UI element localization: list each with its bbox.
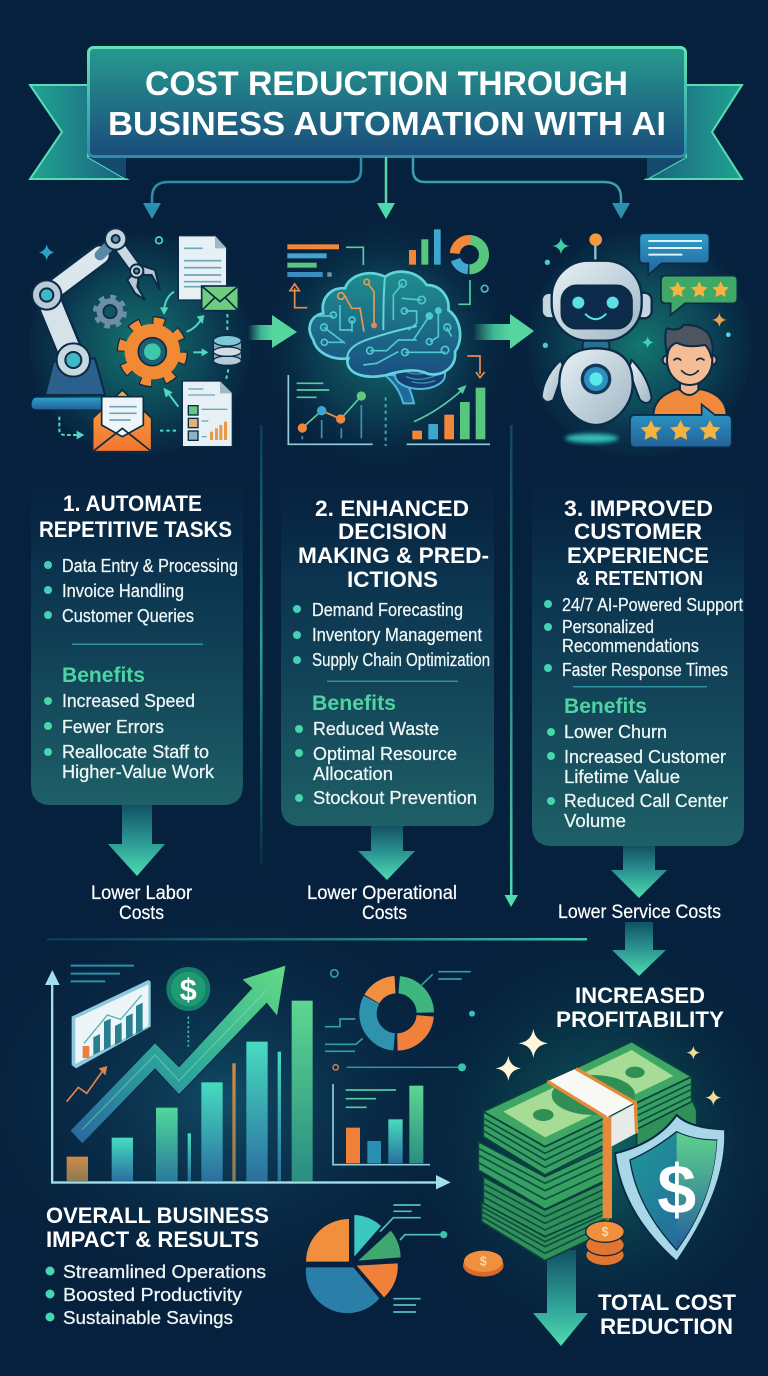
results list: Boosted Productivity [63, 1285, 242, 1305]
heading: total cost reduction: TOTAL COST [598, 1290, 737, 1315]
donut chart [358, 974, 436, 1052]
cerebellum and brain stem [383, 361, 445, 403]
feature list: Personalized [562, 617, 654, 637]
horizontal connector [47, 938, 587, 940]
arrow: banner to column 2 [377, 157, 395, 219]
feature list: Faster Response Times [562, 660, 728, 680]
orange envelope [93, 390, 152, 452]
small gear [95, 297, 125, 326]
arrow: banner to column 3 [413, 157, 630, 219]
heading: increased profitability: INCREASED [575, 983, 705, 1008]
benefits: Volume [564, 811, 626, 831]
heading: DECISION [338, 519, 447, 544]
mini bars and donut [409, 229, 488, 304]
panel: automate repetitive tasks [31, 470, 243, 805]
small bar chart [333, 1011, 475, 1165]
axes [45, 970, 451, 1189]
benefits: Benefits [312, 692, 396, 715]
arrow: to total cost reduction [533, 1250, 588, 1346]
growth bar chart [407, 356, 490, 444]
robot arm joints [32, 228, 160, 377]
pie callouts [380, 1205, 447, 1312]
label: lower operational costs: Lower Operational [307, 883, 457, 904]
heading: 1. AUTOMATE [63, 491, 202, 516]
capability list: Inventory Management [312, 625, 482, 645]
benefits [295, 692, 477, 808]
heading: increased profitability: PROFITABILITY [556, 1007, 724, 1032]
green envelope [202, 286, 238, 311]
benefits: Fewer Errors [62, 717, 164, 737]
task list [44, 556, 238, 626]
brain outline [310, 272, 460, 377]
bill stack top [483, 1042, 692, 1175]
panel: enhanced decision making [281, 470, 494, 826]
shield: $ [657, 1150, 696, 1228]
banner plate [88, 48, 686, 156]
benefits: Stockout Prevention [313, 788, 477, 808]
label: lower labor costs: Costs [119, 903, 164, 924]
banner ribbon tail right [647, 85, 742, 179]
task list: Invoice Handling [62, 581, 184, 601]
workflow arrows [59, 237, 228, 439]
large orange gear [122, 322, 182, 382]
feature list [544, 595, 743, 680]
task list: Data Entry & Processing [62, 556, 238, 576]
capability list [293, 600, 490, 670]
donut callout lines [325, 970, 471, 1051]
bill stack bottom [482, 1202, 610, 1261]
single coin: $ [480, 1255, 487, 1269]
capability list: Demand Forecasting [312, 600, 463, 620]
heading [298, 496, 489, 592]
benefits: Higher-Value Work [62, 762, 215, 782]
robot arm [47, 240, 137, 360]
feature list: 24/7 AI-Powered Support [562, 595, 743, 615]
robot antenna [589, 233, 602, 262]
brain orange circuits [338, 279, 377, 332]
rating badge [630, 404, 732, 447]
benefits: Increased Customer [564, 747, 726, 767]
sparkle [39, 244, 54, 261]
bill stack lower [483, 1177, 610, 1237]
orange band edge [603, 1117, 612, 1218]
robot arms [542, 360, 652, 403]
benefits: Reduced Call Center [564, 791, 728, 811]
heading: total cost reduction: REDUCTION [600, 1314, 733, 1339]
document with chart [182, 381, 232, 447]
benefits: Lower Churn [564, 722, 667, 742]
robot body [559, 340, 633, 425]
vertical connector left [260, 425, 262, 865]
shield [615, 1115, 725, 1262]
title line two: BUSINESS AUTOMATION WITH AI [108, 105, 666, 142]
benefits: Reallocate Staff to [62, 742, 209, 762]
chart: overall growth dashboard [45, 965, 475, 1313]
bars list [287, 244, 363, 308]
robot pedestal [32, 358, 105, 409]
feature list: Recommendations [562, 636, 699, 656]
heading [564, 496, 713, 590]
brain circuits [317, 280, 452, 365]
benefits [44, 664, 215, 782]
bill stack right side [637, 1080, 697, 1153]
arrow: to increased profitability [612, 922, 666, 976]
document top [178, 236, 227, 300]
heading: overall business impact: IMPACT & RESULTS [46, 1227, 259, 1252]
robot head [542, 261, 652, 341]
label: lower operational costs: Costs [362, 903, 407, 924]
benefits: Optimal Resource [313, 744, 457, 764]
benefits [547, 695, 728, 831]
pie chart [306, 1215, 401, 1313]
heading: EXPERIENCE [567, 543, 709, 568]
icon: support robot and happy customer [542, 233, 737, 447]
heading: 3. IMPROVED [564, 496, 713, 521]
results list: Streamlined Operations [63, 1262, 266, 1282]
coin stack [586, 1221, 624, 1266]
arrow: column 1 to column 2 [248, 315, 297, 348]
arrow: to lower operational costs [358, 826, 415, 880]
vertical connector right with arrow [504, 425, 518, 907]
benefits: Lifetime Value [564, 767, 680, 787]
robot glow [565, 434, 618, 443]
benefits: Increased Speed [62, 691, 195, 711]
heading: total cost reduction [598, 1290, 737, 1339]
heading: overall business impact: OVERALL BUSINESS [46, 1203, 269, 1228]
label: lower labor costs [91, 883, 193, 924]
sparkles and dots [543, 237, 731, 348]
paper band [547, 1069, 637, 1147]
heading: overall business impact [46, 1203, 269, 1252]
big growth arrow [70, 965, 286, 1144]
heading: & RETENTION [576, 568, 703, 590]
label: lower service costs: Lower Service Costs [558, 902, 721, 923]
icon: money stack with shield [463, 1029, 725, 1277]
label: lower operational costs [307, 883, 457, 924]
sparkles [496, 1029, 721, 1106]
icon: automation robot arm and documents [32, 228, 242, 452]
bill stack middle [478, 1142, 610, 1209]
heading: REPETITIVE TASKS [39, 517, 232, 542]
growth bars [67, 1001, 313, 1181]
benefits: Benefits [62, 664, 145, 687]
line chart [288, 375, 386, 446]
heading: increased profitability [556, 983, 724, 1032]
arrow: to lower labor costs [108, 805, 165, 876]
icon: brain with analytics [287, 229, 490, 446]
rating bubble green [661, 276, 737, 315]
banner ribbon tail left [30, 85, 126, 179]
title: COST REDUCTION THROUGH [145, 65, 628, 103]
chat bubble blue [639, 233, 709, 275]
benefits: Allocation [313, 764, 393, 784]
chart card [71, 966, 151, 1068]
dollar coin [166, 967, 210, 1047]
arrow: to lower service costs [611, 846, 667, 898]
arrow: banner to column 1 [143, 157, 361, 219]
heading: MAKING & PRED- [298, 543, 489, 568]
dollar coin: $ [180, 973, 197, 1007]
heading: 2. ENHANCED [315, 496, 469, 521]
heading [39, 491, 232, 542]
ribbon fold right [647, 157, 686, 179]
panel: improved customer experience [532, 470, 744, 846]
mini orange trend arrow [67, 1066, 107, 1102]
capability list: Supply Chain Optimization [312, 650, 490, 670]
task list: Customer Queries [62, 606, 194, 626]
benefits: Reduced Waste [313, 719, 439, 739]
brain fold [347, 277, 417, 362]
coin stack: $ [601, 1225, 609, 1239]
heading: ICTIONS [347, 567, 438, 592]
ribbon fold left [88, 157, 126, 179]
customer person [653, 325, 727, 415]
label: lower labor costs: Lower Labor [91, 883, 193, 904]
database [213, 335, 242, 365]
title banner [30, 48, 742, 179]
benefits: Benefits [564, 695, 647, 718]
results list [46, 1262, 266, 1328]
heading: CUSTOMER [574, 519, 702, 544]
results list: Sustainable Savings [63, 1308, 233, 1328]
single coin [463, 1251, 504, 1277]
arrow: column 2 to column 3 [473, 314, 534, 349]
